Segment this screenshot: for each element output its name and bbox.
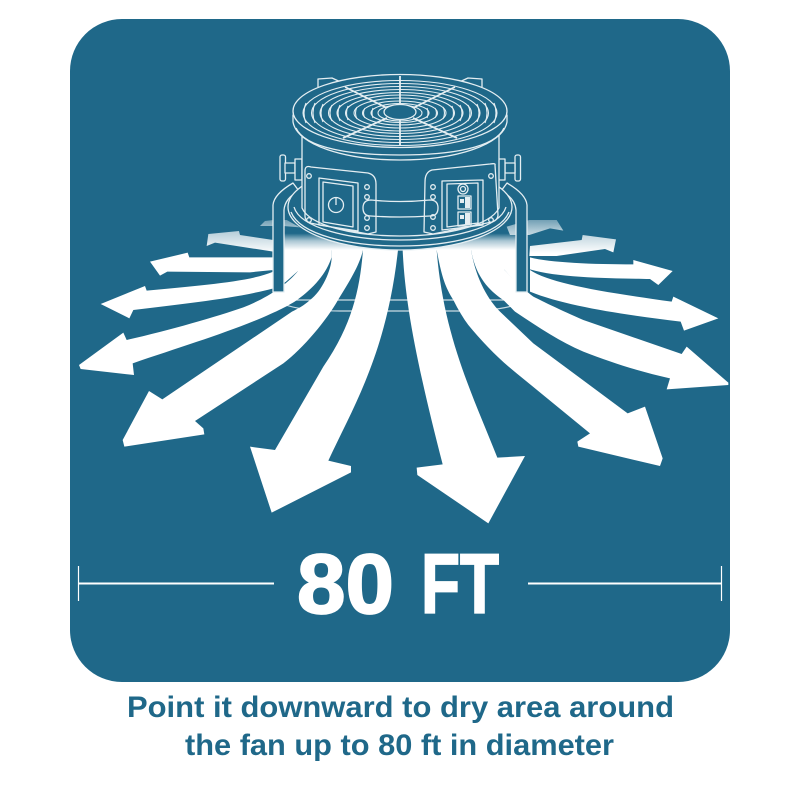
airflow arrows: right side: [403, 220, 728, 523]
arrow: right 4: [530, 270, 718, 331]
arrow: left 1: [207, 231, 273, 252]
fan body: [302, 135, 499, 236]
arrow: left 2: [150, 253, 273, 276]
fan grill: [303, 76, 497, 146]
arrow: right 5: [530, 257, 673, 285]
white airflow band under the fan: [283, 233, 520, 250]
dimension line: left: [78, 566, 274, 601]
arrow: right 2: [437, 250, 663, 466]
handle: [363, 200, 438, 217]
floor lines beneath the fan: [283, 300, 518, 311]
airflow arrows: left side: [79, 220, 520, 513]
dimension line: right: [528, 566, 722, 601]
fan rim: [293, 74, 507, 160]
arrow: right 1: [403, 250, 525, 523]
arrow: far-left faded back: [260, 220, 300, 227]
rear mounting brackets: [318, 78, 482, 87]
right leg: [501, 183, 527, 292]
arrow: right 3: [472, 250, 728, 389]
right knob: [498, 155, 520, 181]
fan illustration: [273, 74, 527, 292]
arrow: right 6: [529, 235, 616, 256]
arrow: left 6: [250, 250, 398, 513]
caption line 1: Point it downward to dry area around: [127, 691, 674, 724]
distance label: [297, 537, 499, 631]
arrow: left 4: [79, 250, 332, 375]
panel: blue rounded background: [70, 19, 730, 682]
right control plate with outlets: [424, 164, 498, 234]
left leg: [273, 183, 299, 292]
airflow fill next to right leg: [504, 250, 520, 285]
left knob: [280, 155, 302, 181]
grill center hub: [384, 104, 416, 120]
caption: [127, 691, 674, 762]
airflow fill next to left leg: [283, 250, 300, 283]
arrow: left 5: [123, 250, 363, 447]
left control plate with power switch: [305, 166, 376, 234]
base ring: [288, 164, 512, 250]
caption line 2: the fan up to 80 ft in diameter: [185, 729, 615, 762]
arrow: right faded back: [507, 220, 563, 235]
distance label: 80: [297, 537, 394, 631]
distance label: FT: [421, 537, 499, 631]
arrow: left 3: [101, 272, 273, 318]
